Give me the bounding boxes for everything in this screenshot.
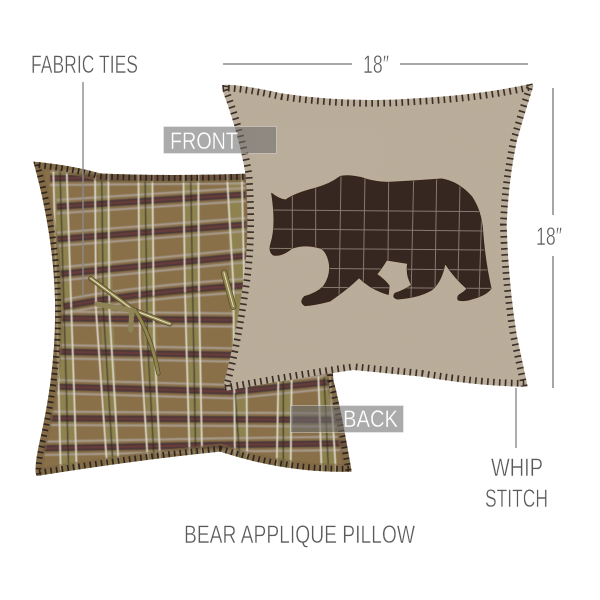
- leader line: whip stitch: [515, 388, 517, 448]
- plaid: olive vertical bands: [53, 170, 336, 473]
- dimension: width 18 inches: 18″: [363, 51, 389, 79]
- fabric ties bow: [91, 273, 233, 373]
- label: back tag: BACK: [343, 406, 398, 433]
- dimension: height 18 inches: 18″: [536, 223, 562, 251]
- label: whip stitch: [485, 454, 548, 513]
- title: product name: BEAR APPLIQUE PILLOW: [184, 521, 415, 549]
- whip stitch edge: [222, 83, 533, 391]
- leader line: fabric ties: [82, 82, 84, 298]
- panel: back of pillow with plaid fabric: [33, 162, 352, 476]
- label: front tag: FRONT: [170, 128, 238, 155]
- whip stitch edge: [33, 162, 352, 476]
- panel: front of pillow with bear applique: [222, 83, 534, 391]
- bear applique: [268, 175, 492, 306]
- back flap seam: [63, 289, 233, 310]
- label: back tag: [290, 406, 404, 433]
- plaid: horizontal bands: [43, 170, 350, 455]
- label: front tag: [164, 126, 276, 155]
- label: whip stitch: WHIP: [491, 454, 543, 482]
- label: whip stitch: STITCH: [485, 485, 548, 513]
- plaid: white vertical lines: [53, 170, 336, 473]
- plaid: dark vertical lines: [60, 170, 329, 473]
- heading: fabric ties label: FABRIC TIES: [31, 51, 138, 79]
